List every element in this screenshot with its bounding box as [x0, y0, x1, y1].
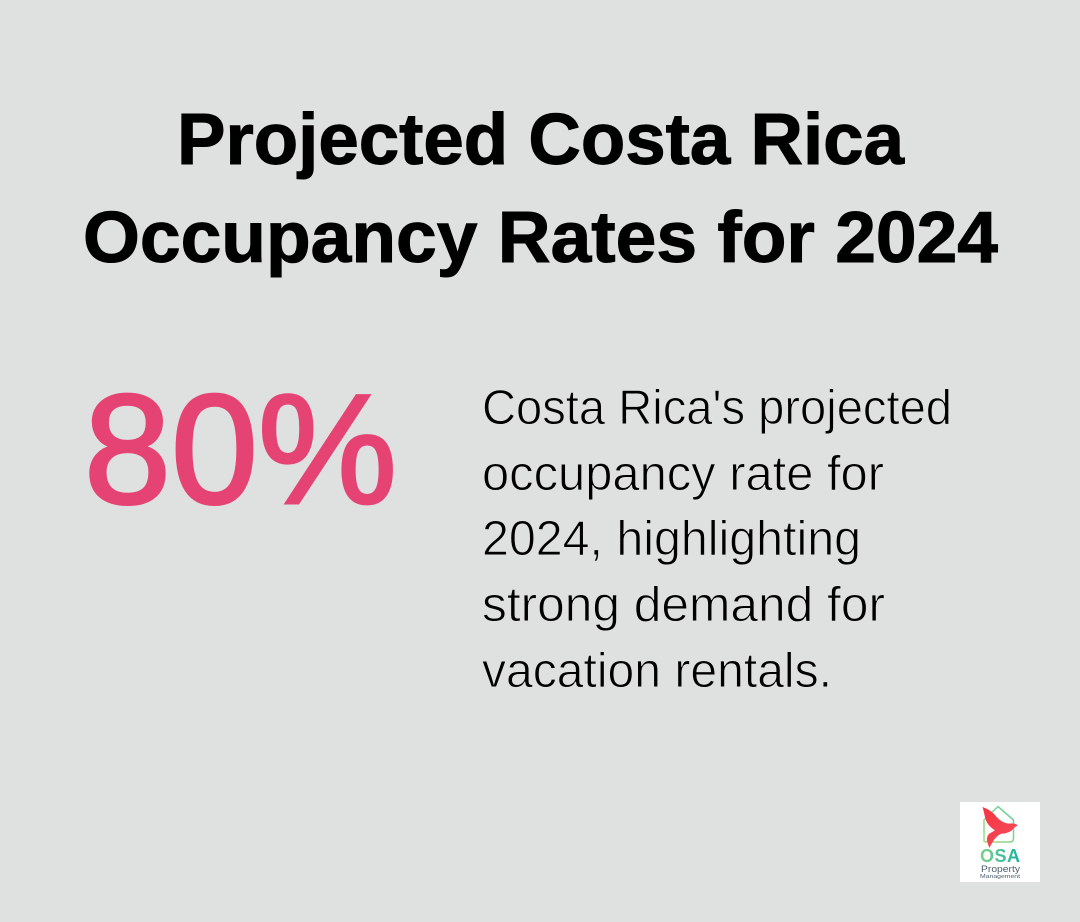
- title: [83, 100, 998, 278]
- title: Projected Costa Rica: [177, 100, 905, 180]
- description text: Costa Rica's projected: [482, 381, 952, 435]
- logo tagline: Property: [981, 864, 1021, 874]
- description text: occupancy rate for: [482, 447, 884, 501]
- icon: red bird: [983, 807, 1018, 848]
- icon: house outline: [984, 806, 1014, 842]
- description text: 2024, highlighting: [482, 512, 861, 566]
- description text: vacation rentals.: [482, 644, 832, 698]
- big stat: 80%: 80%: [84, 363, 397, 537]
- logo: OSA Property Management: Management: [980, 874, 1021, 880]
- description text: [482, 381, 952, 698]
- logo: OSA Property Management: [960, 802, 1040, 882]
- description text: strong demand for: [482, 578, 885, 632]
- logo wordmark: OSA: [980, 846, 1020, 866]
- title: Occupancy Rates for 2024: [83, 198, 998, 278]
